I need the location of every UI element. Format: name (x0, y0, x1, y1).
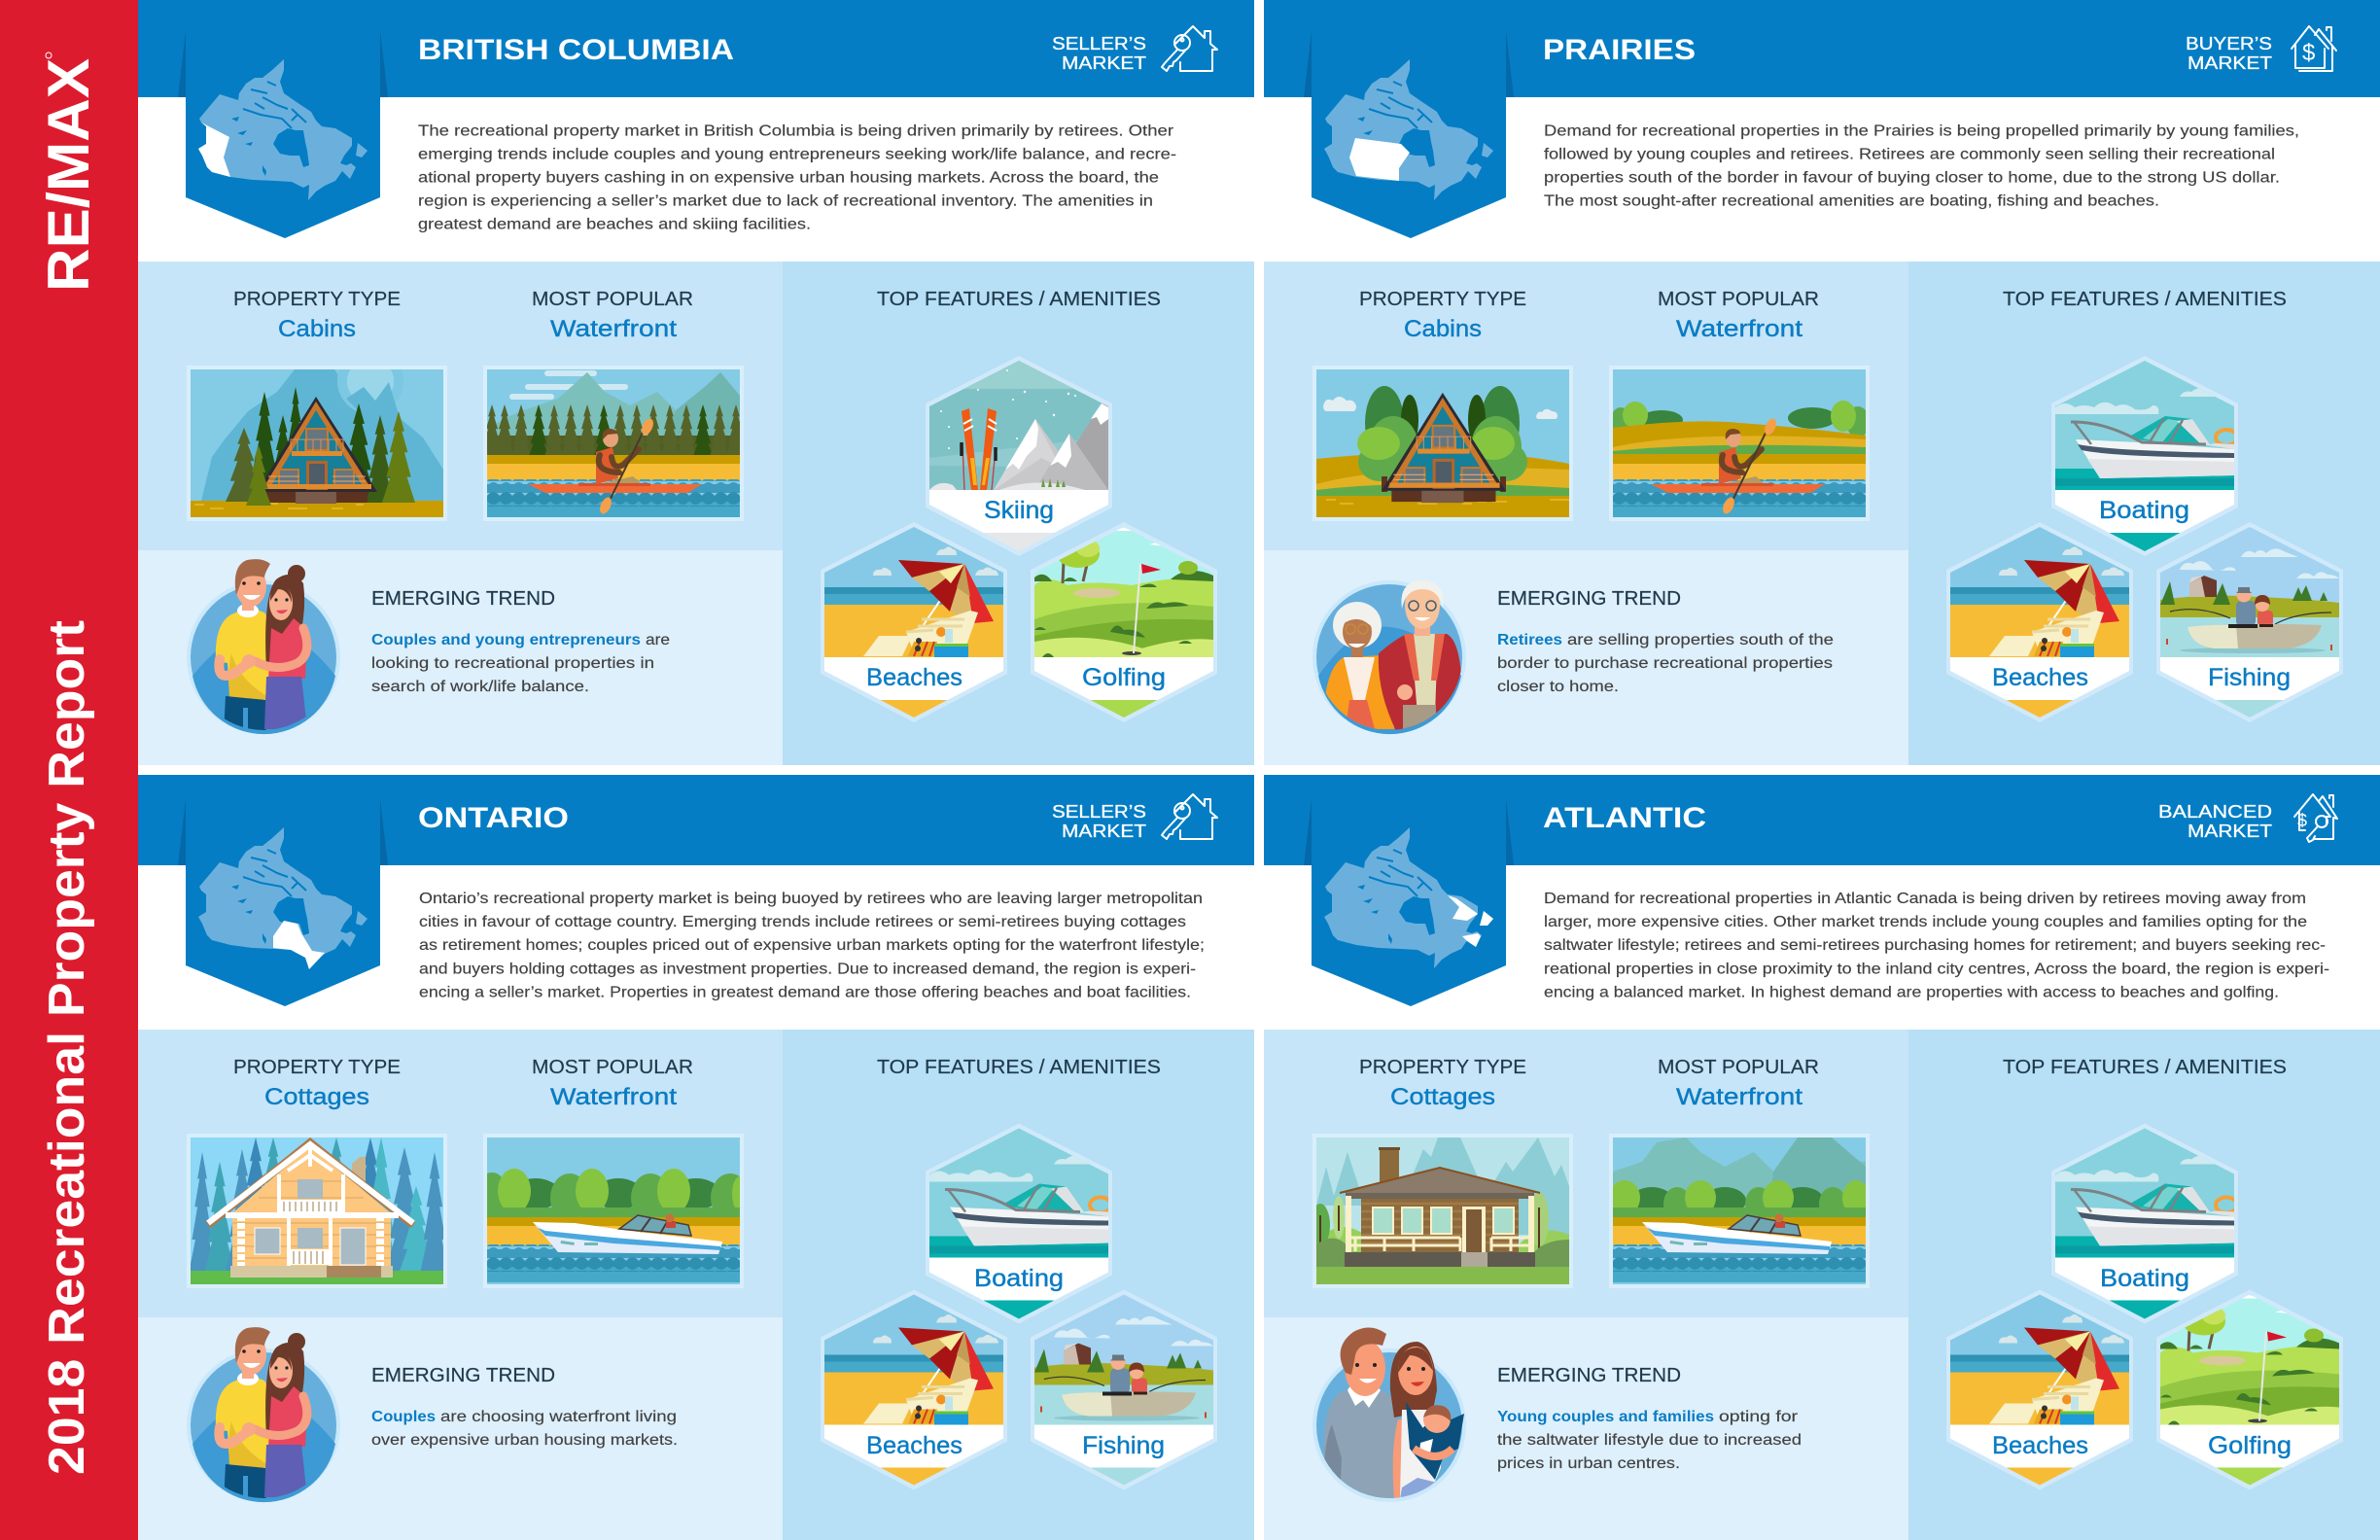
description: saltwater lifestyle; retirees and semi-retirees purchasing homes for retirement; and buyers seeking rec- (1544, 937, 2326, 954)
market label: MARKET (2188, 53, 2272, 73)
panel: Atlantic (1264, 775, 2380, 1540)
property type heading: PROPERTY TYPE (233, 1057, 401, 1078)
amenity: golfing (2156, 1289, 2343, 1489)
description: properties south of the border in favour of buying closer to home, due to the strong US dollar. (1544, 169, 2280, 187)
most popular heading: MOST POPULAR (1658, 289, 1819, 310)
amenity: beaches (1946, 1289, 2133, 1489)
description: encing a balanced market. In highest demand are properties with access to beaches and golfing. (1544, 984, 2279, 1001)
header bar (1264, 0, 2380, 97)
ribbon with map highlighting the Prairies (1304, 29, 1514, 238)
illustration: kayaker with hills (1613, 369, 1866, 517)
description: larger, more expensive cities. Other market trends include young couples and families opting for the (1544, 914, 2307, 930)
description: region is experiencing a seller’s market due to lack of recreational inventory. The amenities in (418, 192, 1153, 210)
illustration: young family (1312, 1327, 1466, 1502)
emerging trend text: Couples (371, 1409, 436, 1425)
amenity: beaches (821, 1289, 1007, 1489)
description (418, 122, 1176, 233)
emerging trend text: are choosing waterfront living (440, 1409, 677, 1425)
most popular heading: Waterfront (550, 316, 677, 342)
property type heading (1359, 289, 1526, 342)
emerging trend text: are (646, 632, 670, 648)
description: Demand for recreational properties in Atlantic Canada is being driven by retirees moving away from (1544, 891, 2306, 907)
ribbon with map highlighting Ontario (178, 797, 388, 1006)
description (1544, 891, 2329, 1001)
description: as retirement homes; couples priced out of expensive urban markets opting for the waterfront lifestyle; (419, 937, 1205, 954)
emerging trend text: looking to recreational properties in (371, 655, 654, 672)
description: The most sought-after recreational amenities are boating, fishing and beaches. (1544, 192, 2159, 210)
amenity: golfing (1031, 522, 1217, 722)
market label: SELLER’S (1052, 34, 1146, 53)
amenity: boating: Boating (974, 1265, 1064, 1292)
icon: house and dollar sign: $ (2302, 40, 2315, 66)
most popular heading (532, 289, 693, 342)
amenity: skiing: Skiing (984, 497, 1054, 524)
picture frames (187, 366, 744, 521)
market label: MARKET (2188, 822, 2272, 841)
amenity: golfing: Golfing (2208, 1432, 2292, 1459)
most popular heading (1658, 289, 1819, 342)
amenity: beaches: Beaches (1992, 1432, 2088, 1459)
illustration: speedboat with mountains (1613, 1138, 1866, 1284)
description: reational properties in close proximity to the inland city centres, Across the board, the region is experi- (1544, 961, 2329, 978)
property type heading: PROPERTY TYPE (1359, 289, 1526, 310)
logo: RE/MAX: RE/MAX (36, 58, 101, 292)
description: encing a seller’s market. Properties in greatest demand are those offering beaches and boat facilities. (419, 984, 1191, 1001)
emerging trend text: search of work/life balance. (371, 679, 589, 695)
header bar (138, 775, 1254, 865)
description: emerging trends include couples and young entrepreneurs seeking work/life balance, and recre- (418, 146, 1176, 163)
amenities heading: TOP FEATURES / AMENITIES (877, 1057, 1161, 1078)
emerging trend text: EMERGING TREND (371, 588, 555, 610)
emerging trend text: prices in urban centres. (1497, 1455, 1680, 1472)
picture frames (187, 1134, 744, 1288)
amenity: beaches: Beaches (1992, 664, 2088, 691)
emerging trend text: the saltwater lifestyle due to increased (1497, 1432, 1802, 1449)
illustration: couple (187, 559, 340, 735)
amenity: boating: Boating (2100, 1265, 2189, 1292)
market label (2186, 34, 2272, 73)
market label: BUYER’S (2186, 34, 2272, 53)
illustration: forest cabin (191, 369, 443, 517)
market label (1052, 34, 1146, 73)
property type heading (1359, 1057, 1526, 1110)
amenities heading: TOP FEATURES / AMENITIES (2003, 1057, 2287, 1078)
amenity: fishing: Fishing (2208, 664, 2291, 691)
emerging trend text: EMERGING TREND (371, 1365, 555, 1386)
description: Ontario’s recreational property market is being buoyed by retirees who are leaving larger metropolitan (419, 891, 1203, 907)
emerging trend text: EMERGING TREND (1497, 588, 1681, 610)
property type heading: Cabins (278, 316, 356, 342)
emerging trend text: border to purchase recreational properties (1497, 655, 1833, 672)
market label (1052, 802, 1146, 841)
emerging trend text (371, 1365, 678, 1449)
market label (2158, 802, 2272, 841)
amenity: fishing (1031, 1289, 1217, 1489)
illustration: log cottage in forest (191, 1138, 443, 1284)
property type heading (233, 289, 401, 342)
amenities heading: TOP FEATURES / AMENITIES (877, 289, 1161, 310)
emerging trend text: Retirees (1497, 632, 1562, 648)
most popular heading: MOST POPULAR (532, 1057, 693, 1078)
report title: 2018 Recreational Property Report (39, 620, 95, 1475)
amenity: beaches: Beaches (866, 664, 962, 691)
icon: house and key (1162, 794, 1217, 839)
illustration: kayaker with mountains (487, 369, 740, 517)
property and amenities backgrounds (1264, 1030, 2380, 1540)
most popular heading (532, 1057, 693, 1110)
ribbon with map highlighting Atlantic Canada (1304, 797, 1514, 1006)
property type heading: PROPERTY TYPE (1359, 1057, 1526, 1078)
property type heading: Cottages (264, 1084, 369, 1110)
most popular heading: MOST POPULAR (1658, 1057, 1819, 1078)
property type heading: PROPERTY TYPE (233, 289, 401, 310)
description (1544, 122, 2299, 210)
illustration: speedboat with trees (487, 1138, 740, 1284)
emerging trend text: over expensive urban housing markets. (371, 1432, 678, 1449)
emerging trend text (1497, 1365, 1802, 1472)
header bar (138, 0, 1254, 97)
illustration: retired couple (1312, 580, 1466, 734)
picture frames (1312, 366, 1870, 521)
property and amenities backgrounds (1264, 262, 2380, 765)
ribbon with map highlighting British Columbia (178, 29, 388, 238)
region title: ATLANTIC (1543, 802, 1706, 834)
icon: house and dollar sign (2292, 26, 2336, 71)
market label: BALANCED (2158, 802, 2272, 822)
most popular heading: Waterfront (550, 1084, 677, 1110)
illustration: bungalow with porch (1316, 1138, 1569, 1284)
emerging trend text: are selling properties south of the (1567, 632, 1834, 648)
description: Demand for recreational properties in the Prairies is being propelled primarily by young families, (1544, 122, 2299, 140)
panel: sidebar (0, 0, 138, 1540)
property type heading: Cabins (1404, 316, 1482, 342)
panel: Prairies (1264, 0, 2380, 765)
emerging trend text (371, 588, 670, 695)
amenity: boating: Boating (2099, 497, 2189, 524)
icon: house and key (1162, 26, 1217, 71)
description: ational property buyers cashing in on expensive urban housing markets. Across the board, the (418, 169, 1159, 187)
amenity: beaches: Beaches (866, 1432, 962, 1459)
description: greatest demand are beaches and skiing facilities. (418, 216, 811, 233)
property type heading: Cottages (1390, 1084, 1495, 1110)
most popular heading: Waterfront (1676, 1084, 1802, 1110)
emerging trend text (1497, 588, 1834, 695)
emerging trend text: Young couples and families (1497, 1409, 1714, 1425)
region title: PRAIRIES (1543, 34, 1696, 66)
amenity: beaches (821, 522, 1007, 722)
property and amenities backgrounds (138, 1030, 1254, 1540)
amenity: skiing (926, 356, 1112, 556)
amenity: fishing: Fishing (1082, 1432, 1165, 1459)
description: followed by young couples and retirees. Retirees are commonly seen selling their recreational (1544, 146, 2275, 163)
amenity: beaches (1946, 522, 2133, 722)
region title: BRITISH COLUMBIA (418, 34, 734, 66)
amenity: boating (926, 1124, 1112, 1324)
market label: MARKET (1062, 53, 1146, 73)
illustration: cabin in prairie hills (1316, 369, 1569, 517)
emerging trend text: EMERGING TREND (1497, 1365, 1681, 1386)
illustration: couple (187, 1327, 340, 1503)
amenity: fishing (2156, 522, 2343, 722)
property type heading (233, 1057, 401, 1110)
description: cities in favour of cottage country. Emerging trends include retirees or semi-retirees buying cottages (419, 914, 1186, 930)
picture frames (1312, 1134, 1870, 1288)
icon: house, key and dollar sign: $ (2297, 811, 2307, 830)
amenity: boating (2051, 356, 2238, 556)
icon: house, key and dollar sign (2294, 794, 2337, 842)
description: and buyers holding cottages as investment properties. Due to increased demand, the region is experi- (419, 961, 1196, 978)
market label: SELLER’S (1052, 802, 1146, 822)
most popular heading (1658, 1057, 1819, 1110)
panel: Ontario (138, 775, 1254, 1540)
most popular heading: Waterfront (1676, 316, 1802, 342)
most popular heading: MOST POPULAR (532, 289, 693, 310)
amenity: boating (2051, 1124, 2238, 1324)
description: The recreational property market in British Columbia is being driven primarily by retirees. Other (418, 122, 1174, 140)
panel: British Columbia (138, 0, 1254, 765)
market label: MARKET (1062, 822, 1146, 841)
description (419, 891, 1205, 1001)
emerging trend text: closer to home. (1497, 679, 1619, 695)
emerging trend text: Couples and young entrepreneurs (371, 632, 641, 648)
property and amenities backgrounds (138, 262, 1254, 765)
amenities heading: TOP FEATURES / AMENITIES (2003, 289, 2287, 310)
amenity: golfing: Golfing (1082, 664, 1166, 691)
header bar (1264, 775, 2380, 865)
region title: ONTARIO (418, 802, 569, 834)
emerging trend text: opting for (1719, 1409, 1799, 1425)
